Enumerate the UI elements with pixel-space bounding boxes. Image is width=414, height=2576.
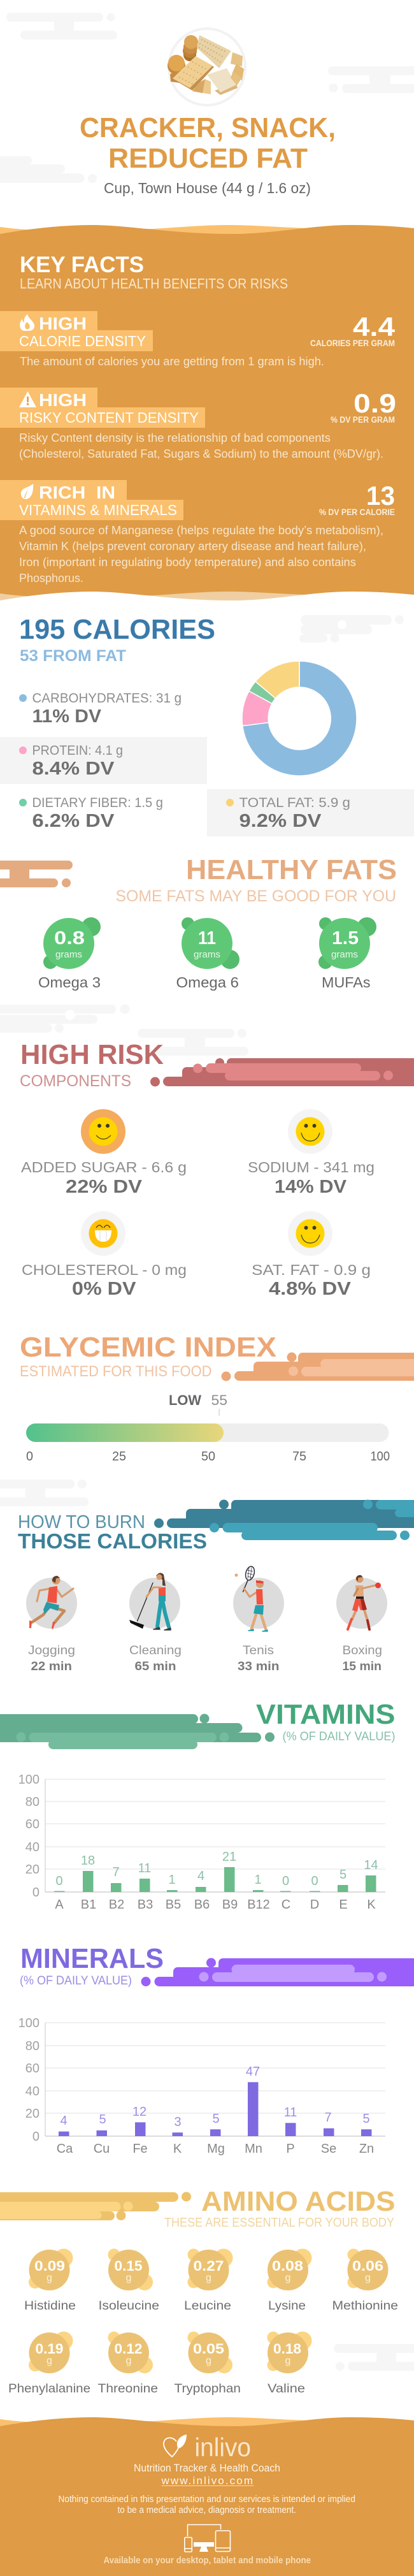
website link: www.inlivo.com [161, 2475, 253, 2487]
badge: omega 3 [38, 917, 101, 991]
amino: tryptophan: g [206, 2355, 211, 2366]
amino: threonine [98, 2332, 158, 2396]
bar chart: vitamins: 20 [25, 1863, 39, 1877]
amino: tryptophan: Tryptophan [175, 2382, 241, 2396]
activity: cleaning [129, 1573, 182, 1673]
subheading: components: COMPONENTS [20, 1073, 131, 1090]
activity: jogging: 22 min [31, 1659, 72, 1673]
bar chart: vitamins: 14 [364, 1858, 378, 1872]
bar chart: vitamins: 0 [55, 1874, 63, 1888]
activity: tennis [233, 1566, 284, 1673]
component: added sugar: 22% DV [66, 1177, 143, 1197]
subheading: vitamins: (% OF DAILY VALUE) [283, 1729, 395, 1743]
bar chart: vitamins: 1 [254, 1873, 262, 1887]
component: added sugar [21, 1109, 187, 1197]
fact: calorie density: HIGH [39, 314, 87, 333]
icon: smiling face [288, 1211, 332, 1256]
icon: flame [20, 314, 34, 331]
heading: glycemic index: GLYCEMIC INDEX [20, 1332, 276, 1363]
amino: histidine: g [46, 2273, 52, 2283]
fact: risky content density: (Cholesterol, Saturated Fat, Sugars & Sodium) to the amount (%DV/gr). [19, 448, 383, 460]
availability note: Available on your desktop, tablet and mobile phone [103, 2556, 311, 2566]
disclaimer: Nothing contained in this presentation and our services is intended or implied [59, 2494, 355, 2505]
icon: smiling face [81, 1109, 125, 1154]
fact: calorie density: CALORIES PER GRAM [310, 338, 395, 348]
legend: total fat: 9.2% DV [239, 811, 322, 831]
legend: total fat: TOTAL FAT: 5.9 g [239, 795, 350, 810]
legend: protein: PROTEIN: 4.1 g [32, 743, 123, 758]
bar chart: minerals: K [173, 2142, 182, 2156]
amino: threonine: Threonine [98, 2382, 158, 2396]
bar chart: vitamins: 1 [168, 1873, 176, 1887]
amino: histidine [24, 2249, 76, 2313]
bar chart: minerals: Cu [94, 2142, 110, 2156]
activity: boxing [336, 1575, 387, 1673]
bar chart: minerals: 20 [25, 2107, 39, 2121]
heading: how to burn those calories: THOSE CALORIES [18, 1530, 207, 1554]
component: added sugar: ADDED SUGAR - 6.6 g [21, 1159, 187, 1175]
bar chart: minerals: Se [321, 2142, 336, 2156]
amino: histidine: 0.09 [34, 2258, 65, 2274]
amino: phenylalanine: Phenylalanine [8, 2382, 90, 2396]
badge: MUFAs [318, 917, 376, 991]
fact: calorie density: 4.4 [353, 312, 396, 342]
badge: omega 6: 11 [198, 928, 216, 949]
bar chart: vitamins: A [55, 1898, 64, 1912]
fact: risky content density: RISKY CONTENT DENSITY [19, 409, 199, 426]
activity: tennis: Tenis [243, 1643, 274, 1657]
amino: histidine: Histidine [24, 2299, 76, 2313]
subheading: amino acids: THESE ARE ESSENTIAL FOR YOUR BODY [164, 2216, 394, 2230]
tagline: Nutrition Tracker & Health Coach [134, 2462, 280, 2474]
legend: protein [19, 743, 123, 779]
amino: tryptophan [175, 2332, 241, 2396]
heading: how to burn those calories: HOW TO BURN [18, 1512, 145, 1532]
legend: dietary fiber: 6.2% DV [32, 811, 115, 831]
bar chart: vitamins: 5 [339, 1868, 346, 1882]
bar chart: minerals: 11 [284, 2106, 297, 2120]
decoration: vitamins stripes [0, 1714, 275, 1749]
bar chart: vitamins: 40 [25, 1840, 39, 1854]
bar chart: vitamins: B9 [222, 1898, 238, 1912]
icon: jogger [26, 1576, 77, 1629]
heading: vitamins: VITAMINS [256, 1699, 395, 1730]
amino: leucine: Leucine [184, 2299, 231, 2313]
heading: 195 calories: 195 CALORIES [19, 615, 215, 645]
heading: how to burn those calories [18, 1512, 207, 1554]
amino: valine: Valine [268, 2382, 305, 2396]
amino: lysine: Lysine [268, 2299, 306, 2313]
disclaimer [59, 2494, 355, 2515]
badge: omega 3: Omega 3 [38, 974, 101, 991]
bar chart: minerals: Zn [359, 2142, 374, 2156]
component: saturated fat: 4.8% DV [269, 1279, 352, 1299]
panel: calories [0, 615, 414, 836]
bar chart: minerals: 7 [324, 2111, 332, 2125]
activity: cleaning: 65 min [135, 1659, 176, 1673]
component: sodium [248, 1109, 375, 1197]
amino: lysine [268, 2249, 312, 2313]
fact: risky content density [0, 388, 396, 460]
food photo: crackers [168, 29, 245, 105]
heading: minerals: MINERALS [20, 1944, 164, 1974]
legend: dietary fiber: DIETARY FIBER: 1.5 g [32, 795, 163, 810]
bar chart: minerals: 5 [212, 2112, 220, 2126]
icon: leaf [21, 484, 33, 499]
amino: valine [268, 2332, 312, 2396]
decoration: glycemic stripes [222, 1353, 414, 1381]
badge: MUFAs: grams [331, 949, 358, 960]
bar chart: vitamins: E [339, 1898, 348, 1912]
glycemic index gauge: 100 [371, 1450, 390, 1464]
fact: rich in vitamins and minerals: % DV PER CALORIE [319, 507, 395, 517]
serving size: Cup, Town House (44 g / 1.6 oz) [104, 180, 311, 196]
bar chart: vitamins: 21 [222, 1850, 236, 1864]
fact: risky content density: 0.9 [353, 388, 396, 418]
bar chart: vitamins: B1 [81, 1898, 96, 1912]
bar chart: minerals: Fe [132, 2142, 148, 2156]
amino: leucine [184, 2249, 233, 2313]
legend: carbohydrates: 11% DV [32, 706, 102, 727]
amino: tryptophan: 0.05 [193, 2341, 224, 2357]
component: saturated fat [252, 1211, 371, 1299]
bar chart: vitamins: 4 [197, 1869, 204, 1883]
fact: risky content density: % DV PER GRAM [331, 415, 395, 425]
amino: isoleucine: 0.15 [115, 2258, 143, 2274]
glycemic index gauge [26, 1392, 390, 1464]
icon: desktop, tablet and phone [185, 2524, 231, 2552]
glycemic index gauge: LOW [169, 1392, 201, 1408]
activity: jogging: Jogging [28, 1643, 75, 1657]
badge: MUFAs: MUFAs [322, 974, 371, 991]
bar chart: vitamins: 0 [32, 1886, 39, 1900]
legend: carbohydrates [19, 690, 182, 727]
amino: lysine: 0.08 [272, 2258, 303, 2274]
bar chart: minerals: 12 [132, 2105, 146, 2119]
badge: MUFAs: 1.5 [332, 928, 359, 949]
bar chart: vitamins: 7 [112, 1865, 120, 1879]
title: REDUCED FAT [108, 143, 308, 174]
badge: omega 3: grams [55, 949, 82, 960]
amino: valine: 0.18 [273, 2341, 301, 2357]
amino: phenylalanine: g [46, 2355, 52, 2366]
subheading: minerals: (% OF DAILY VALUE) [20, 1974, 132, 1988]
disclaimer: to be a medical advice, diagnosis or treatment. [117, 2505, 296, 2515]
fact: rich in vitamins and minerals: A good source of Manganese (helps regulate the body’s metabolism), [19, 524, 383, 537]
panel: footer [0, 2417, 414, 2576]
bar chart: vitamins: B2 [109, 1898, 124, 1912]
icon: person sweeping [129, 1573, 180, 1630]
amino: leucine: 0.27 [194, 2258, 224, 2274]
activity: tennis: 33 min [238, 1659, 279, 1673]
activity: boxing: Boxing [343, 1643, 382, 1657]
component: cholesterol [22, 1211, 187, 1299]
bar chart: vitamins: 0 [311, 1874, 318, 1888]
amino: methionine: g [365, 2273, 371, 2283]
amino: isoleucine: g [126, 2273, 131, 2283]
bar chart: minerals: 3 [174, 2115, 182, 2129]
icon: grinning face [81, 1211, 125, 1256]
bar chart: vitamins: C [282, 1898, 290, 1912]
fact: rich in vitamins and minerals: VITAMINS & MINERALS [19, 502, 177, 518]
fact: risky content density: Risky Content density is the relationship of bad components [19, 432, 331, 444]
fact: rich in vitamins and minerals: Phosphorus. [19, 572, 83, 585]
fact: rich in vitamins and minerals [0, 480, 395, 585]
activity: boxing: 15 min [343, 1659, 382, 1673]
donut chart [242, 661, 357, 776]
subheading: 53 from fat: 53 FROM FAT [20, 647, 126, 665]
icon: smiling face [288, 1109, 332, 1154]
bar chart: minerals: 100 [18, 2016, 39, 2030]
decoration: minerals stripes [141, 1958, 414, 1986]
amino: lysine: g [285, 2273, 290, 2283]
panel: key facts [0, 225, 414, 622]
heading: key facts: KEY FACTS [20, 252, 144, 277]
logo: inlivo: inlivo [195, 2433, 251, 2462]
bar chart: minerals [18, 2016, 385, 2156]
badge: omega 6: grams [194, 949, 220, 960]
heading: high risk: HIGH RISK [20, 1040, 164, 1070]
legend: dietary fiber [19, 795, 163, 831]
legend: total fat [226, 795, 350, 831]
legend: protein: 8.4% DV [32, 759, 115, 779]
bar chart: minerals: 40 [25, 2085, 39, 2099]
title [80, 113, 336, 174]
fact: rich in vitamins and minerals: RICH IN [39, 483, 115, 502]
amino: phenylalanine: 0.19 [36, 2341, 64, 2357]
bar chart: vitamins: B6 [194, 1898, 210, 1912]
heading: amino acids: AMINO ACIDS [201, 2187, 395, 2217]
bar chart: minerals: P [286, 2142, 295, 2156]
subheading: key facts: LEARN ABOUT HEALTH BENEFITS OR RISKS [20, 275, 288, 292]
badge: omega 6: Omega 6 [176, 974, 239, 991]
bar chart: vitamins: B12 [247, 1898, 270, 1912]
icon: warning triangle [19, 391, 36, 407]
bar chart: minerals: 60 [25, 2062, 39, 2076]
bar chart: minerals: Ca [57, 2142, 73, 2156]
decoration: healthy fats stripes [0, 861, 73, 887]
glycemic index gauge: 55 [211, 1392, 227, 1408]
fact: rich in vitamins and minerals: Vitamin K (helps prevent coronary artery disease and heart failure), [19, 540, 366, 553]
component: cholesterol: 0% DV [72, 1279, 136, 1299]
bar chart: vitamins: 100 [18, 1773, 39, 1787]
fact: risky content density: HIGH [39, 390, 87, 410]
bar chart: vitamins: 11 [138, 1861, 151, 1875]
component: sodium: 14% DV [275, 1177, 347, 1197]
badge: omega 3: 0.8 [54, 928, 85, 949]
bar chart: minerals: 4 [60, 2114, 68, 2128]
bar chart: minerals: Mg [207, 2142, 225, 2156]
fact: calorie density: The amount of calories you are getting from 1 gram is high. [20, 355, 324, 368]
decoration: burn stripes [154, 1499, 414, 1540]
bar chart: minerals: 5 [99, 2113, 106, 2127]
fact: rich in vitamins and minerals: Iron (important in regulating body temperature) and also contains [19, 556, 356, 569]
glycemic index gauge: 50 [201, 1450, 215, 1464]
bar chart: vitamins: B5 [166, 1898, 181, 1912]
glycemic index gauge: 25 [112, 1450, 126, 1464]
bar chart: vitamins: K [367, 1898, 376, 1912]
heading: healthy fats: HEALTHY FATS [186, 855, 397, 885]
logo: inlivo [164, 2433, 251, 2462]
amino: leucine: g [206, 2273, 211, 2283]
component: cholesterol: CHOLESTEROL - 0 mg [22, 1262, 187, 1278]
bar chart: vitamins: 60 [25, 1817, 39, 1831]
decoration: amino acids stripes [0, 2192, 191, 2220]
bar chart: minerals: 80 [25, 2039, 39, 2053]
amino: threonine: g [126, 2355, 131, 2366]
glycemic index gauge: 75 [292, 1450, 306, 1464]
legend: carbohydrates: CARBOHYDRATES: 31 g [32, 690, 182, 706]
bar chart: vitamins: 0 [282, 1874, 289, 1888]
bar chart: minerals: 5 [362, 2112, 370, 2126]
subheading: healthy fats: SOME FATS MAY BE GOOD FOR YOU [116, 888, 396, 905]
activity: jogging [26, 1576, 77, 1673]
bar chart: vitamins [18, 1773, 385, 1912]
fact: calorie density: CALORIE DENSITY [19, 333, 146, 349]
bar chart: vitamins: B3 [138, 1898, 153, 1912]
amino: isoleucine [98, 2249, 159, 2313]
bar chart: vitamins: 18 [81, 1854, 95, 1868]
title: CRACKER, SNACK, [80, 113, 336, 143]
bar chart: vitamins: 80 [25, 1795, 39, 1809]
activity: cleaning: Cleaning [129, 1643, 182, 1657]
bar chart: minerals: Mn [245, 2142, 262, 2156]
component: saturated fat: SAT. FAT - 0.9 g [252, 1262, 371, 1278]
fact: rich in vitamins and minerals: 13 [366, 481, 395, 511]
glycemic index gauge: 0 [26, 1450, 33, 1464]
bar chart: minerals: 0 [32, 2130, 39, 2144]
badge: omega 6 [176, 917, 239, 991]
decoration: high risk stripes [150, 1058, 414, 1086]
amino: methionine: 0.06 [352, 2258, 383, 2274]
fact: calorie density [0, 311, 396, 368]
amino: valine: g [285, 2355, 290, 2366]
icon: tennis player [233, 1566, 284, 1631]
amino: methionine: Methionine [332, 2299, 398, 2313]
amino: isoleucine: Isoleucine [98, 2299, 159, 2313]
bar chart: vitamins: D [310, 1898, 319, 1912]
amino: threonine: 0.12 [115, 2341, 143, 2357]
subheading: glycemic index: ESTIMATED FOR THIS FOOD [20, 1363, 211, 1380]
component: sodium: SODIUM - 341 mg [248, 1159, 375, 1175]
bar chart: minerals: 47 [246, 2065, 260, 2079]
icon: boxer [336, 1575, 387, 1629]
amino: methionine [332, 2249, 398, 2313]
amino: phenylalanine [8, 2332, 90, 2396]
